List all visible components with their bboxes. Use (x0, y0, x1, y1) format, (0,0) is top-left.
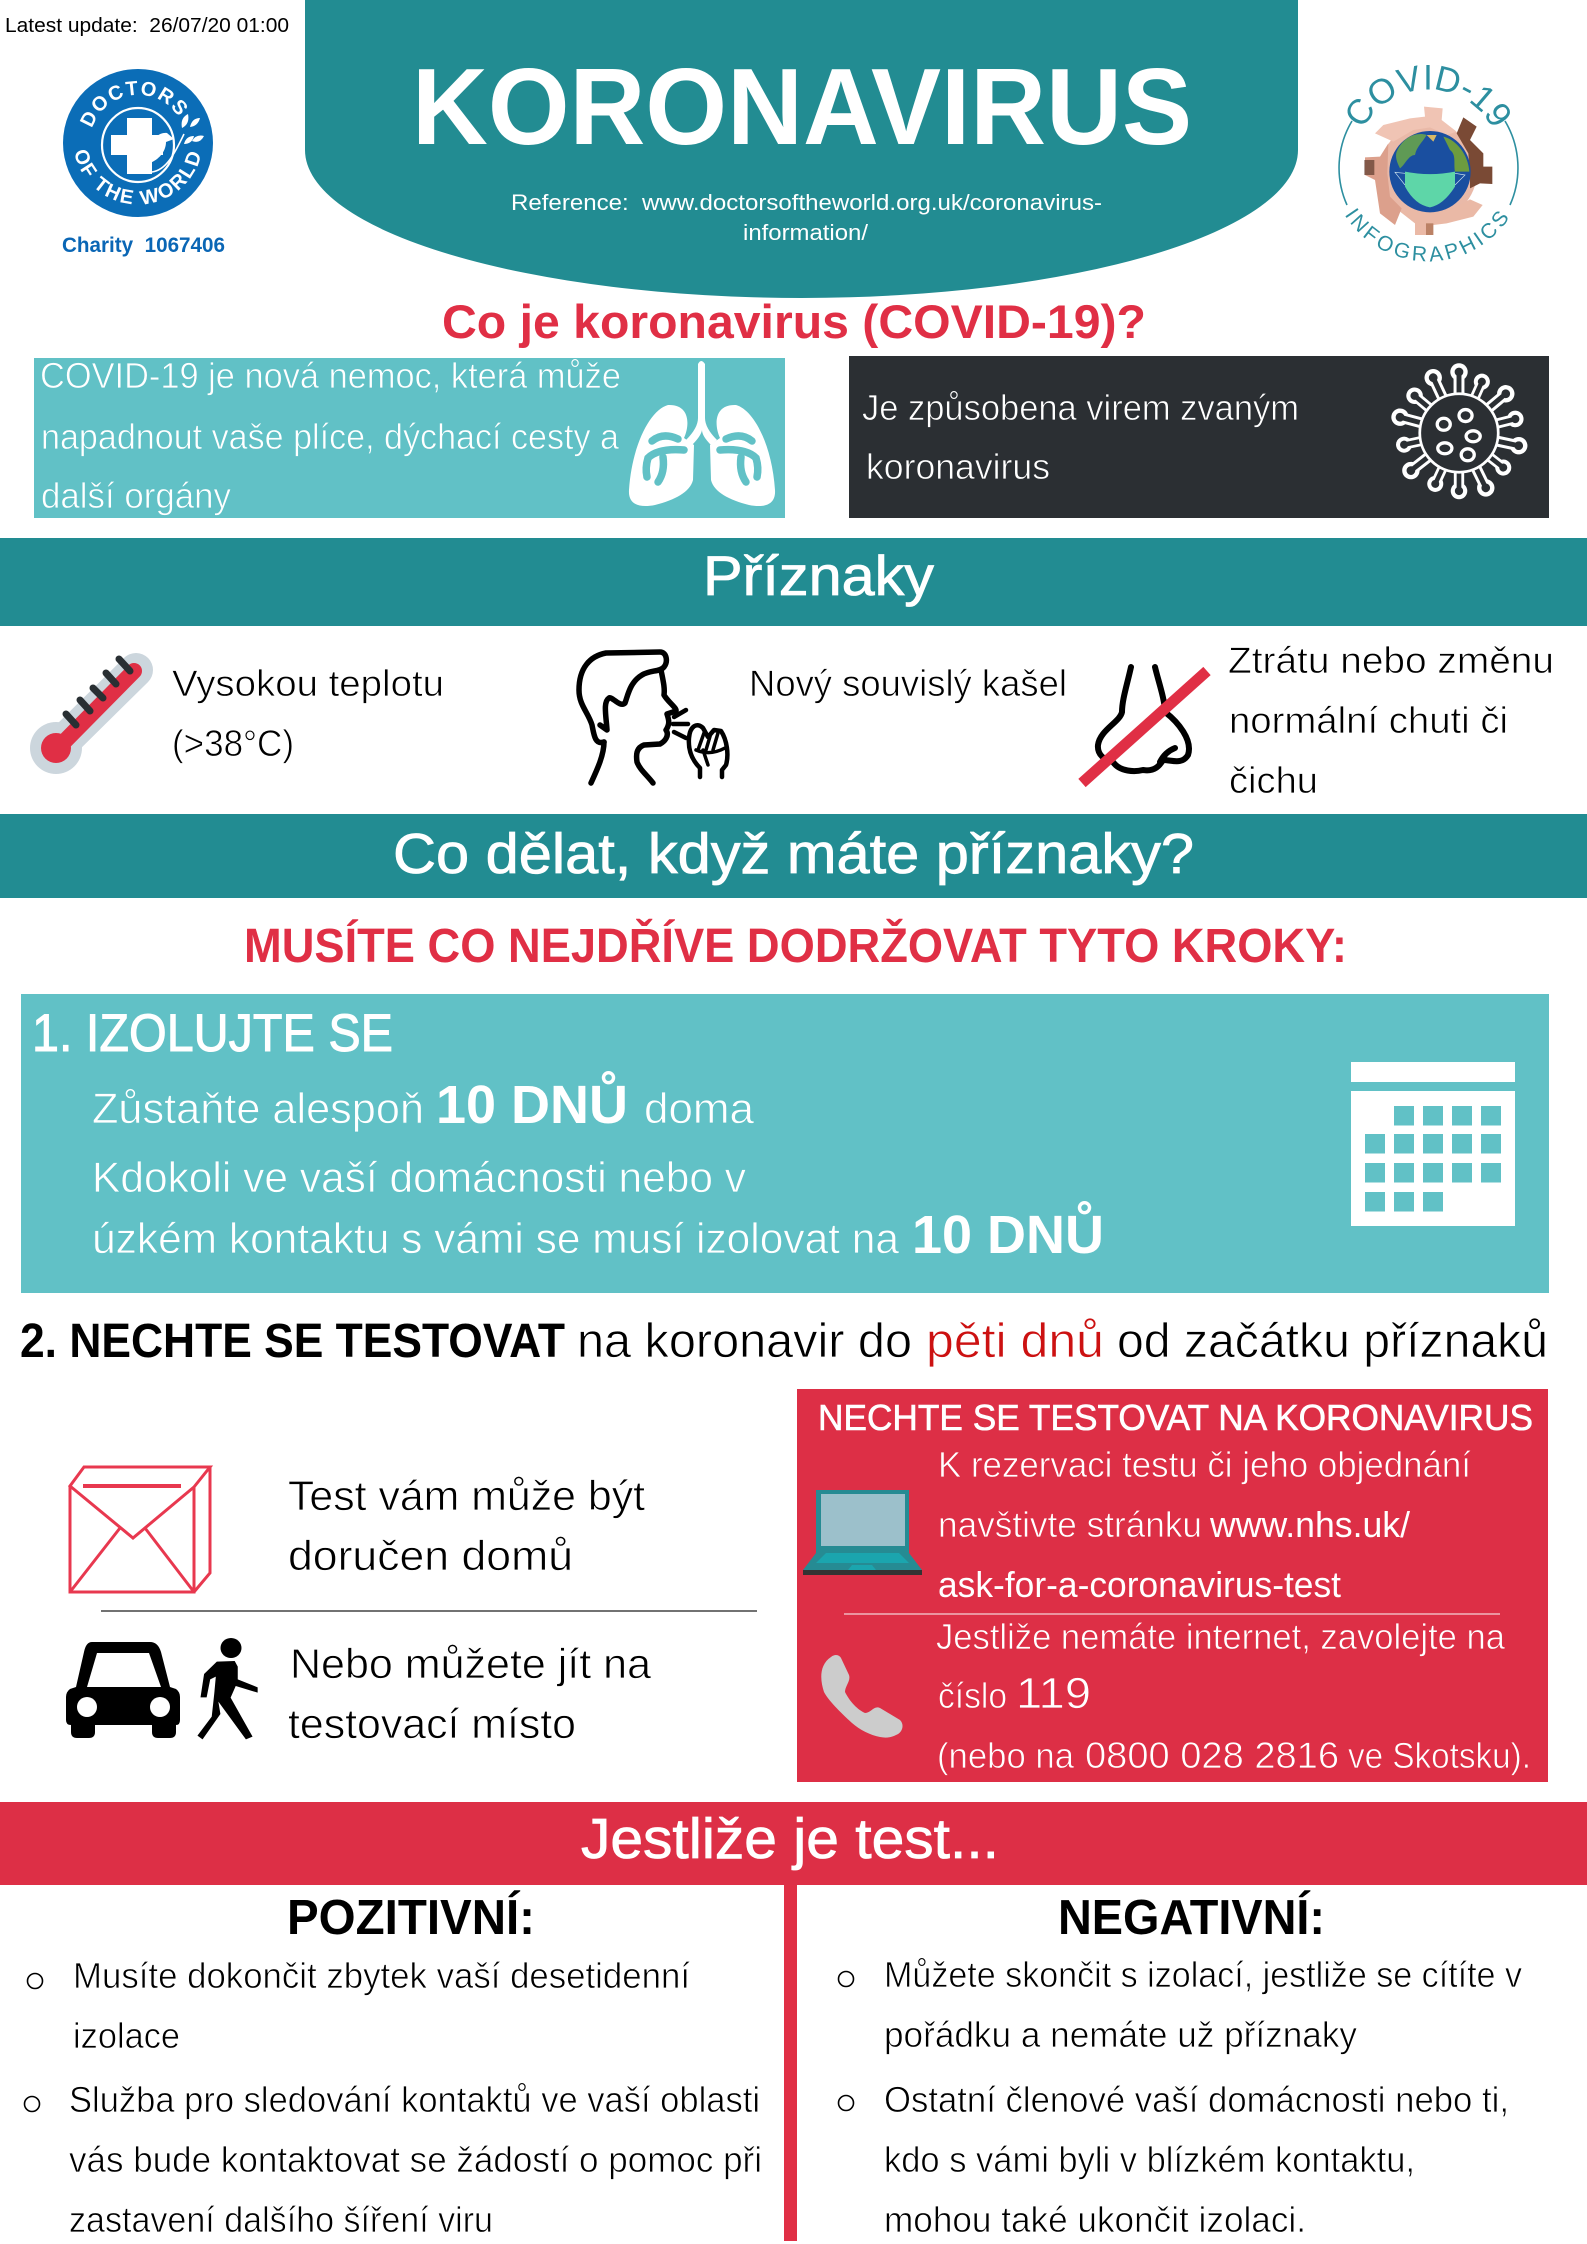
negative bullet 1: pořádku a nemáte už příznaky (884, 2014, 1357, 2055)
symptom: loss of taste or smell: normální chuti či (1229, 700, 1508, 741)
heading: follow these steps: MUSÍTE CO NEJDŘÍVE DODRŽOVAT TYTO KROKY: (244, 918, 1347, 973)
step 2 heading: get tested: 2. NECHTE SE TESTOVAT (20, 1315, 565, 1368)
icon: Doctors of the World logo: DOCTORS (80, 80, 187, 128)
icon: virus (1389, 363, 1529, 500)
panel: cause (849, 356, 1549, 518)
header banner (305, 0, 1298, 298)
icon: coughing person (579, 652, 727, 783)
symptom: loss of taste or smell (1228, 640, 1554, 801)
reference link (511, 190, 1102, 245)
positive bullet 1: Musíte dokončit zbytek vaší desetidenní (73, 1955, 690, 1996)
icon: envelope (70, 1467, 210, 1592)
icon: car (66, 1642, 180, 1738)
icon: phone (821, 1655, 903, 1738)
cause text: Je způsobena virem zvaným (862, 387, 1299, 428)
positive heading: POZITIVNÍ: (287, 1891, 535, 1945)
step 1 heading: 1. IZOLUJTE SE (32, 1004, 393, 1063)
stay at home line: Zůstaňte alespoň (92, 1085, 424, 1133)
title: KORONAVIRUS (412, 46, 1192, 168)
cause text: koronavirus (866, 446, 1050, 487)
positive bullet 1: izolace (73, 2015, 180, 2056)
column: positive result (24, 1891, 762, 2240)
symptoms heading: Příznaky (703, 544, 934, 607)
cause text (862, 387, 1299, 487)
household contacts lines: 10 DNŮ (912, 1201, 1104, 1265)
option: go to test site (288, 1640, 652, 1747)
stay at home line: doma (644, 1085, 754, 1133)
negative bullet 2 (838, 2079, 1509, 2240)
icon: walking person (197, 1638, 258, 1739)
negative bullet 2: mohou také ukončit izolaci. (884, 2199, 1306, 2240)
icon: lungs (629, 361, 775, 506)
booking panel heading: NECHTE SE TESTOVAT NA KORONAVIRUS (818, 1397, 1533, 1438)
phone instructions: ve Skotsku). (1348, 1735, 1531, 1776)
positive bullet 1 (28, 1955, 690, 2056)
icon: Doctors of the World logo (63, 69, 213, 217)
positive bullet 2: Služba pro sledování kontaktů ve vaší oblasti (69, 2079, 760, 2120)
booking instructions: www.nhs.uk/ (1209, 1504, 1410, 1545)
phone instructions: Jestliže nemáte internet, zavolejte na (936, 1616, 1506, 1657)
household contacts lines: úzkém kontaktu s vámi se musí izolovat na (92, 1215, 899, 1263)
symptom: high temperature: (>38°C) (172, 723, 294, 764)
symptom: loss of taste or smell: čichu (1229, 760, 1318, 801)
latest update note: Latest update: 26/07/20 01:00 (5, 15, 289, 37)
negative heading: NEGATIVNÍ: (1058, 1891, 1325, 1945)
symptom: loss of taste or smell: Ztrátu nebo změnu (1228, 640, 1554, 681)
icon: laptop (803, 1490, 922, 1575)
icon: COVID-19 infographics badge: COVID-19 (1348, 65, 1510, 125)
reference link: information/ (743, 220, 869, 245)
household contacts lines: Kdokoli ve vaší domácnosti nebo v (92, 1154, 746, 1202)
booking instructions (938, 1444, 1471, 1605)
booking instructions: K rezervaci testu či jeho objednání (938, 1444, 1471, 1485)
test result heading: Jestliže je test... (581, 1807, 999, 1871)
option: test delivered home (288, 1472, 645, 1579)
negative bullet 1: Můžete skončit s izolací, jestliže se cítíte v (884, 1954, 1522, 1995)
panel: book a test (797, 1389, 1548, 1782)
heading: what is coronavirus: Co je koronavirus (COVID-19)? (442, 295, 1146, 348)
phone instructions: 119 (1016, 1669, 1091, 1718)
what to do banner (0, 814, 1587, 898)
definition text: COVID-19 je nová nemoc, která může (40, 355, 621, 396)
test result banner (0, 1802, 1587, 1885)
symptoms banner (0, 538, 1587, 626)
column: negative result (838, 1891, 1522, 2240)
phone instructions: (nebo na (937, 1735, 1075, 1776)
icon: crossed-out nose (1082, 667, 1207, 783)
reference link: Reference: www.doctorsoftheworld.org.uk/coronavirus- (511, 190, 1102, 215)
positive bullet 2: zastavení dalšího šíření viru (69, 2199, 493, 2240)
option: test delivered home: Test vám může být (288, 1472, 645, 1519)
positive bullet 2 (24, 2079, 762, 2240)
option: go to test site: Nebo můžete jít na (290, 1640, 652, 1687)
charity number: Charity 1067406 (62, 234, 225, 257)
booking instructions: ask-for-a-coronavirus-test (938, 1564, 1341, 1605)
stay at home line (92, 1071, 754, 1135)
option: test delivered home: doručen domů (288, 1532, 573, 1579)
step 2 heading: get tested (20, 1315, 1548, 1368)
option: go to test site: testovací místo (288, 1700, 576, 1747)
symptom: high temperature (172, 663, 444, 764)
negative bullet 2: kdo s vámi byli v blízkém kontaktu, (884, 2139, 1415, 2180)
definition text (40, 355, 621, 516)
icon: Doctors of the World logo: OF THE WORLD (75, 150, 200, 204)
negative bullet 2: Ostatní členové vaší domácnosti nebo ti, (884, 2079, 1509, 2120)
stay at home line: 10 DNŮ (436, 1071, 628, 1135)
definition text: další orgány (41, 475, 231, 516)
definition text: napadnout vaše plíce, dýchací cesty a (41, 416, 620, 457)
symptom: new continuous cough: Nový souvislý kašel (749, 663, 1067, 704)
icon: thermometer (30, 659, 136, 774)
step 2 heading: get tested: na koronavir do (577, 1315, 912, 1368)
phone instructions: 0800 028 2816 (1085, 1735, 1339, 1776)
positive bullet 2: vás bude kontaktovat se žádostí o pomoc při (69, 2139, 762, 2180)
panel: definition (34, 355, 785, 518)
symptom: high temperature: Vysokou teplotu (172, 663, 444, 704)
icon: calendar (1351, 1062, 1515, 1226)
what to do heading: Co dělat, když máte příznaky? (393, 822, 1194, 886)
step 2 heading: get tested: od začátku příznaků (1117, 1315, 1548, 1368)
phone instructions: číslo (938, 1675, 1007, 1716)
phone instructions (936, 1616, 1531, 1776)
booking instructions: navštivte stránku (938, 1504, 1202, 1545)
step 2 heading: get tested: pěti dnů (926, 1315, 1104, 1368)
negative bullet 1 (838, 1954, 1522, 2055)
column divider (784, 1885, 797, 2241)
icon: COVID-19 infographics badge (1338, 65, 1519, 262)
panel: step 1 isolate (21, 994, 1549, 1293)
household contacts lines (92, 1154, 1104, 1265)
icon: COVID-19 infographics badge: INFOGRAPHICS (1346, 208, 1508, 262)
